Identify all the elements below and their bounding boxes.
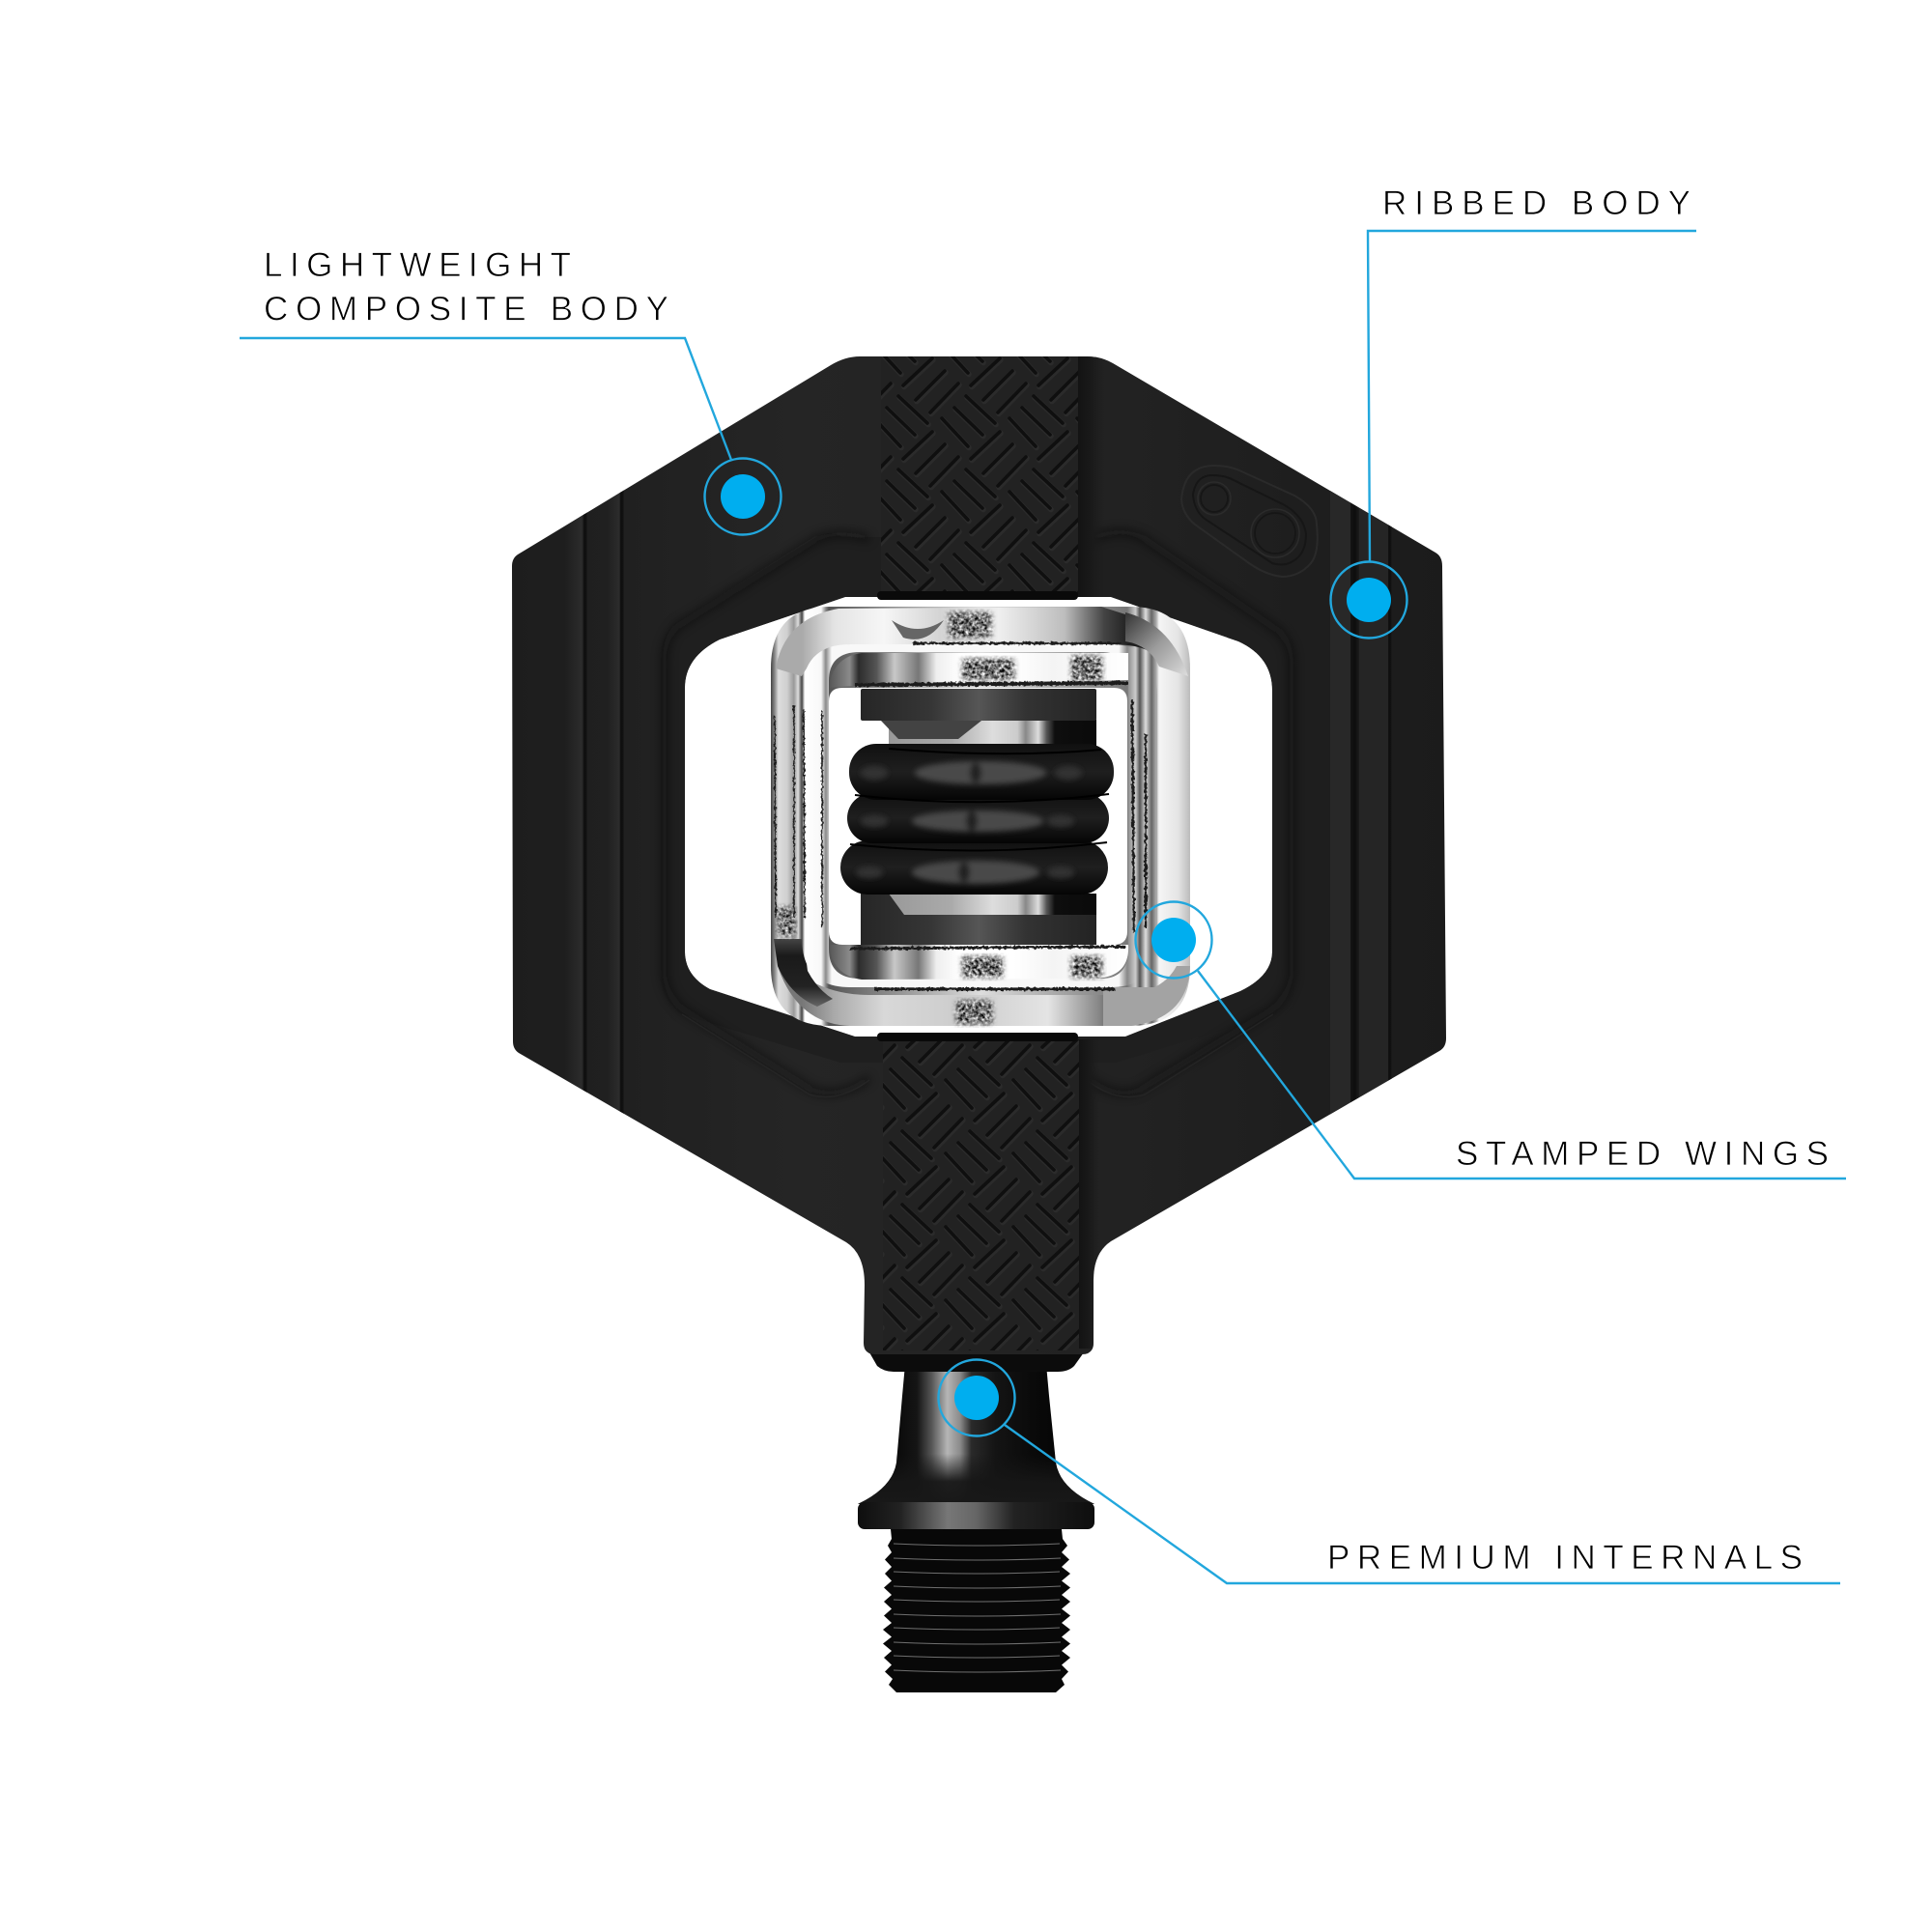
right ribs (1330, 464, 1392, 1121)
spring and internals (840, 689, 1114, 945)
axle neck (858, 1364, 1094, 1504)
top right wing corner (1125, 612, 1188, 676)
bottom textured band (883, 1039, 1100, 1350)
chrome reflections (778, 612, 992, 1024)
callout: ribbed body (1331, 185, 1696, 638)
marker (1331, 562, 1406, 638)
label text: RIBBED BODY (1382, 185, 1690, 222)
marker (1136, 902, 1211, 978)
bottom back bar (778, 966, 1103, 1026)
lower collar (869, 1352, 1084, 1372)
callout: premium internals (939, 1360, 1840, 1583)
label text (264, 246, 668, 328)
body relief details (565, 356, 1392, 1350)
left ribs (569, 491, 624, 1114)
axle flange (858, 1502, 1094, 1529)
top textured band (881, 356, 1105, 598)
leader line (1198, 971, 1846, 1179)
top back bar (776, 607, 1184, 676)
spindle thread (883, 1529, 1070, 1692)
callout: lightweight composite body (240, 246, 781, 535)
lower spring cap (861, 894, 1096, 945)
marker (939, 1360, 1014, 1435)
pedal illustration (512, 356, 1446, 1692)
logo emboss (1181, 466, 1318, 577)
spring coils (840, 744, 1114, 895)
label text: LIGHTWEIGHT (264, 246, 571, 284)
label text: STAMPED WINGS (1456, 1135, 1829, 1173)
label text: PREMIUM INTERNALS (1327, 1539, 1803, 1577)
inner window contour shading (685, 597, 1272, 1037)
bottom right wing corner (1103, 966, 1190, 1026)
leader line (1368, 231, 1696, 562)
coil highlights (856, 761, 1082, 884)
outer wing frame (771, 607, 1190, 1026)
upper spring cap (861, 689, 1096, 751)
marker (705, 458, 781, 535)
axle and threaded spindle (858, 1352, 1094, 1692)
black end caps at the window (877, 591, 1078, 1041)
stamped metal wings (771, 607, 1190, 1026)
top barrel (829, 653, 1128, 688)
barrel reflections (962, 656, 1102, 978)
front bright frame (802, 644, 1157, 987)
leader line (240, 338, 731, 460)
leader line (1005, 1425, 1840, 1583)
callout: stamped wings (1136, 902, 1846, 1179)
bottom left dark corner (774, 939, 833, 1007)
label text: COMPOSITE BODY (264, 290, 668, 328)
dark chrome seams (775, 643, 1146, 989)
bottom barrel (829, 945, 1128, 980)
composite body (512, 356, 1446, 1354)
neck lower shade (858, 1454, 1094, 1504)
